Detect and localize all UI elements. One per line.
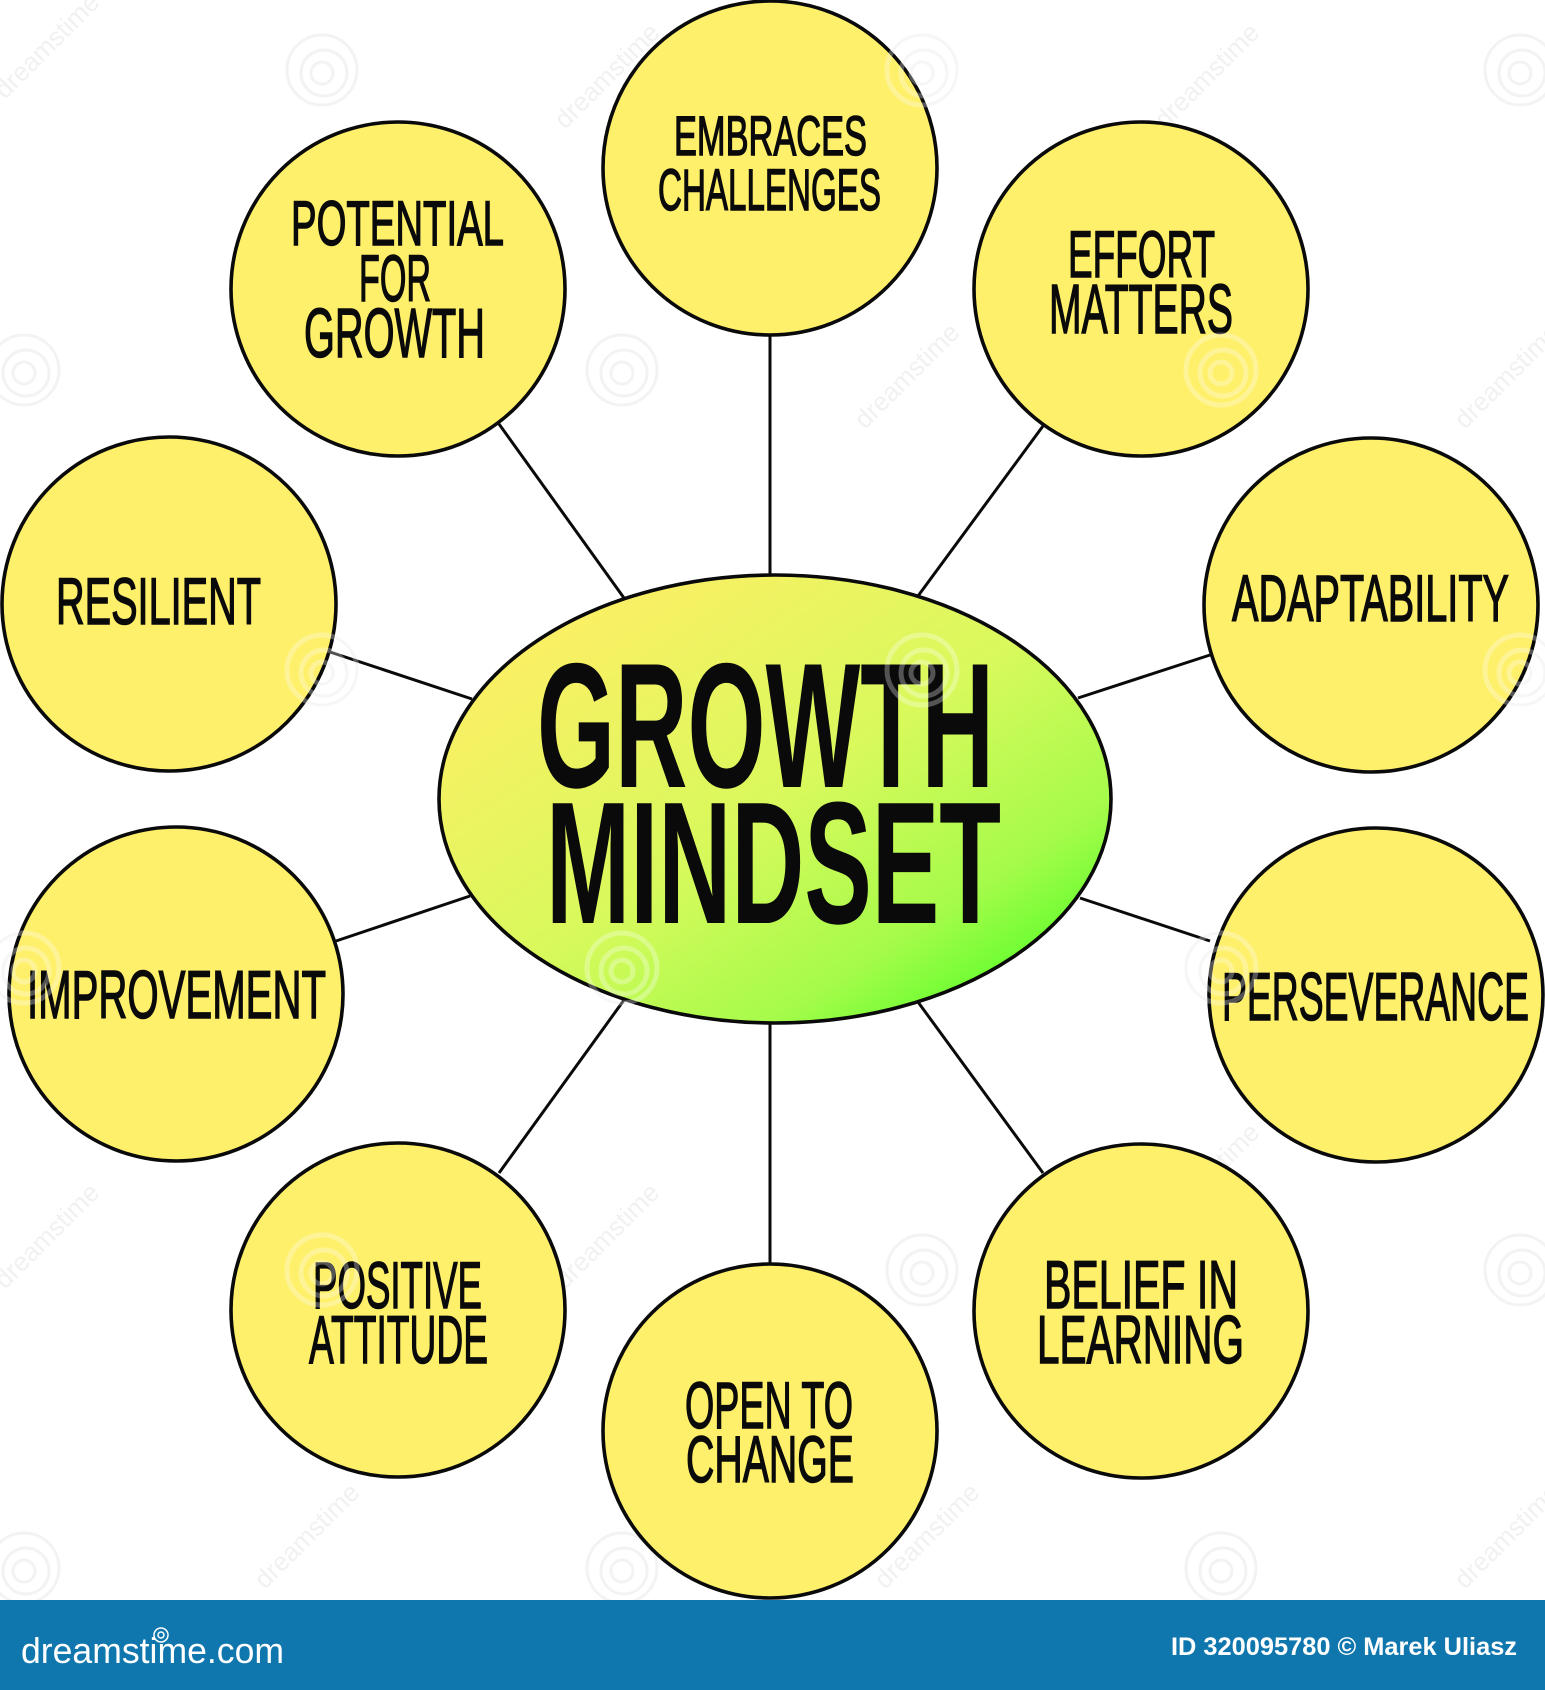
node: belief in learning: LEARNING	[1037, 1302, 1244, 1378]
footer bar	[0, 1600, 1545, 1690]
node: resilient: RESILIENT	[56, 564, 261, 638]
node: embraces challenges: CHALLENGES	[658, 158, 881, 223]
node: positive attitude: POSITIVE	[313, 1248, 482, 1322]
node: belief in learning: BELIEF IN	[1044, 1247, 1238, 1323]
node: positive attitude: ATTITUDE	[309, 1302, 488, 1378]
node: embraces challenges: EMBRACES	[674, 104, 867, 167]
watermark text: dreamstime	[548, 1177, 665, 1294]
footer credit: ID 320095780 © Marek Uliasz	[1171, 1633, 1517, 1661]
node: improvement: IMPROVEMENT	[27, 957, 326, 1033]
watermark text: dreamstime	[548, 17, 665, 134]
node: effort matters	[974, 122, 1308, 456]
node: belief in learning	[974, 1144, 1308, 1478]
node: effort matters: EFFORT	[1068, 217, 1215, 291]
node: open to change: CHANGE	[686, 1422, 854, 1496]
node: potential for growth: POTENTIAL	[291, 189, 504, 259]
watermark text: dreamstime	[1148, 17, 1265, 134]
node: potential for growth: FOR	[359, 241, 431, 315]
watermark text: dreamstime	[848, 317, 965, 434]
node: adaptability	[1204, 438, 1538, 772]
node: resilient	[2, 437, 336, 771]
node: open to change	[603, 1264, 937, 1598]
node: effort matters: MATTERS	[1049, 270, 1233, 348]
connector lines	[330, 336, 1210, 1264]
central node: growth mindset: GROWTH	[537, 626, 994, 825]
node: potential for growth: GROWTH	[304, 294, 485, 372]
footer logo: dreamstime.com	[21, 1630, 284, 1671]
watermark text: dreamstime	[868, 1477, 985, 1594]
node: embraces challenges	[603, 1, 937, 335]
central node: growth mindset	[439, 575, 1111, 1023]
node: potential for growth	[231, 122, 565, 456]
footer logo spiral mark	[154, 1628, 168, 1642]
central node: growth mindset: MINDSET	[546, 765, 1001, 960]
watermark text: dreamstime	[248, 1477, 365, 1594]
watermark text: dreamstime	[1148, 1117, 1265, 1234]
node: improvement	[9, 827, 343, 1161]
node: perseverance	[1209, 828, 1543, 1162]
watermark overlay	[0, 35, 1545, 1305]
node: open to change: OPEN TO	[685, 1368, 853, 1442]
node: positive attitude	[231, 1143, 565, 1477]
